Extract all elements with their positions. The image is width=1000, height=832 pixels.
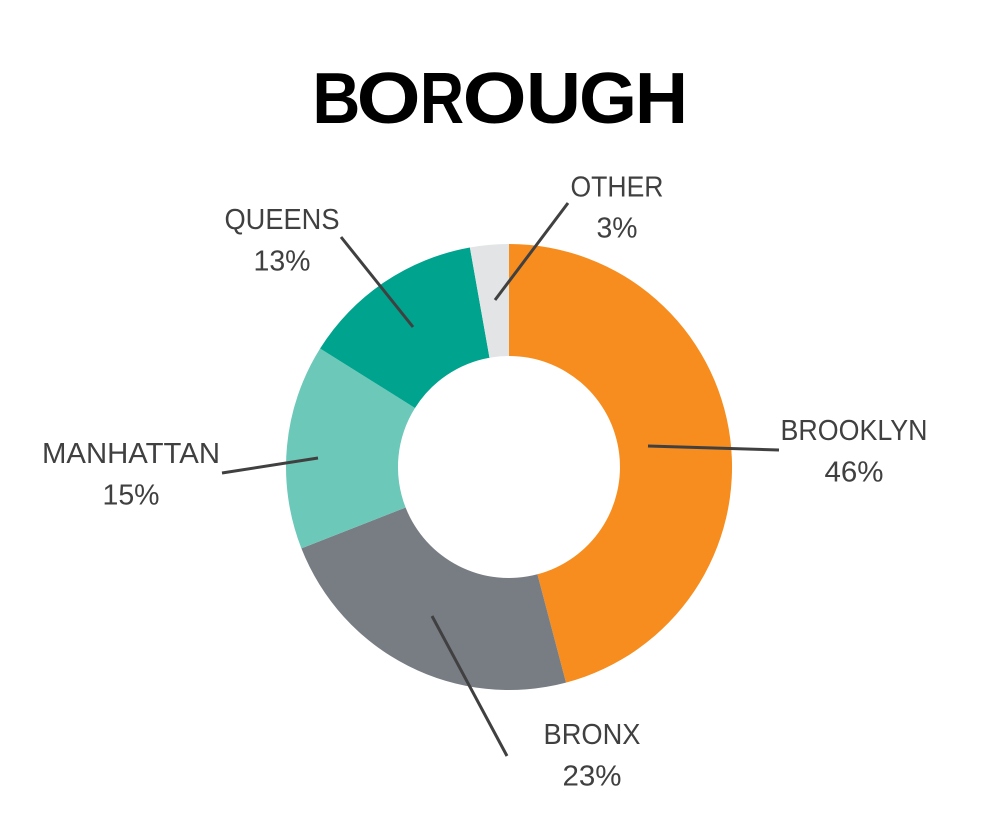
- label: Brooklyn: BROOKLYN: [780, 415, 928, 447]
- label: Brooklyn: [780, 415, 928, 488]
- leader line: Bronx: [432, 616, 507, 756]
- title: B: [312, 59, 360, 139]
- label: Bronx: 23%: [562, 760, 622, 792]
- label: Manhattan: 15%: [102, 480, 160, 512]
- label: Manhattan: MANHATTAN: [42, 438, 220, 470]
- slice: Queens: [320, 248, 490, 408]
- leader line: Other: [495, 203, 568, 300]
- label: Manhattan: [42, 438, 220, 512]
- label: Bronx: [544, 719, 640, 792]
- label: Other: 3%: [596, 212, 638, 244]
- label: Bronx: BRONX: [544, 719, 640, 751]
- label: Queens: QUEENS: [224, 204, 340, 236]
- slice: Brooklyn: [509, 244, 732, 683]
- label: Other: [570, 172, 664, 244]
- title: H: [635, 59, 688, 139]
- slice: Bronx: [301, 508, 566, 690]
- label: Brooklyn: 46%: [824, 456, 884, 488]
- leader line: Manhattan: [222, 458, 318, 473]
- slice: Other: [470, 244, 509, 358]
- title: G: [579, 59, 637, 139]
- slice: Manhattan: [286, 348, 415, 548]
- label: Queens: 13%: [254, 246, 310, 278]
- title: O: [357, 59, 421, 139]
- leader line: Brooklyn: [648, 446, 779, 450]
- title: O: [463, 59, 527, 139]
- title: R: [420, 59, 464, 139]
- leader line: Queens: [341, 237, 413, 327]
- title: U: [526, 59, 581, 139]
- label: Other: OTHER: [570, 172, 664, 204]
- label: Queens: [224, 204, 340, 278]
- donut chart: [286, 244, 732, 690]
